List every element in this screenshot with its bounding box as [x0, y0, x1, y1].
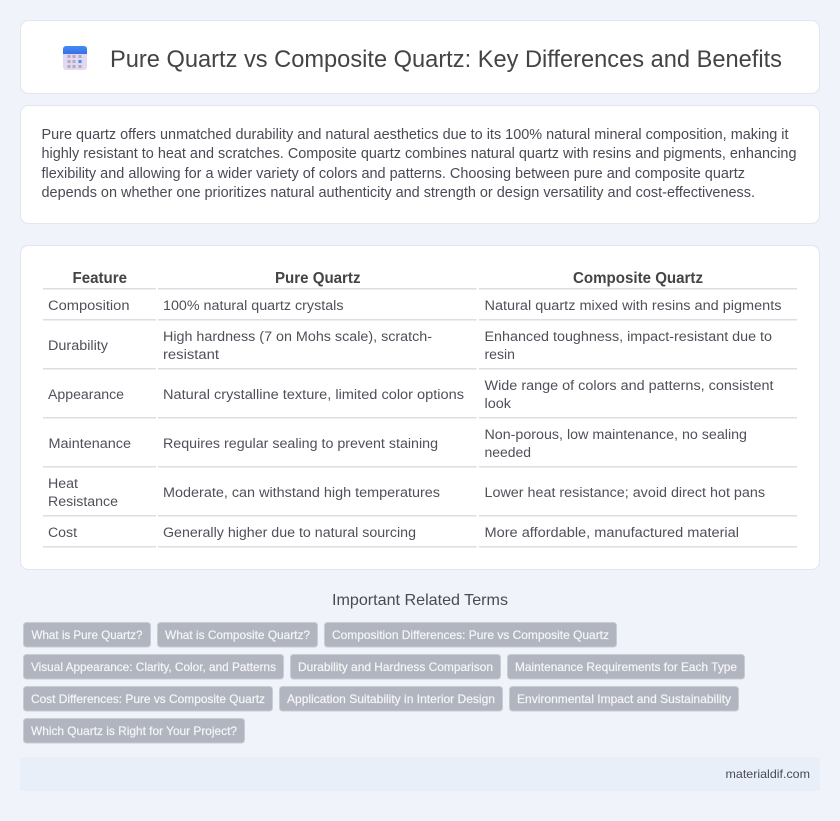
tag: Durability and Hardness Comparison	[298, 660, 493, 674]
tag: What is Composite Quartz?	[165, 628, 310, 642]
tag: Visual Appearance: Clarity, Color, and Patterns	[31, 660, 276, 674]
heading: important related terms: Important Related Terms	[332, 592, 508, 609]
footer source text: materialdif.com	[726, 767, 810, 781]
row: maintenance: Requires regular sealing to prevent staining	[163, 436, 438, 452]
tag	[24, 622, 150, 647]
tag	[24, 718, 244, 743]
panel: header	[20, 20, 820, 94]
tag	[508, 654, 744, 679]
tag: Cost Differences: Pure vs Composite Quartz	[31, 692, 265, 706]
table header row: Pure Quartz	[275, 270, 361, 287]
row: appearance: look	[484, 396, 512, 412]
tag	[510, 686, 738, 711]
row: cost	[48, 525, 739, 541]
row: durability: resistant	[163, 347, 219, 363]
row: composition	[48, 298, 782, 314]
tag	[324, 622, 616, 647]
footer	[20, 757, 820, 791]
row: appearance: Wide range of colors and patterns, consistent	[484, 378, 774, 394]
row: heat resistance	[48, 476, 765, 510]
tag	[280, 686, 502, 711]
row: durability: Enhanced toughness, impact-resistant due to	[484, 329, 772, 345]
table header row	[72, 270, 703, 287]
row: maintenance: needed	[484, 445, 531, 461]
tag: Which Quartz is Right for Your Project?	[31, 724, 237, 738]
tag: Environmental Impact and Sustainability	[517, 692, 731, 706]
intro text: highly resistant to heat and scratches. Composite quartz combines natural quartz with resins and pigments, enhancing	[42, 146, 797, 162]
row: heat resistance: Lower heat resistance; avoid direct hot pans	[484, 485, 765, 501]
row: maintenance: Non-porous, low maintenance, no sealing	[484, 427, 747, 443]
tag	[158, 622, 318, 647]
intro text: depends on whether one prioritizes natural authenticity and strength or design versatility and cost-effectiveness.	[42, 185, 755, 201]
table header row: Feature	[72, 270, 127, 287]
row: composition: 100% natural quartz crystals	[163, 298, 344, 314]
tag	[290, 654, 500, 679]
row: appearance: Appearance	[48, 387, 124, 403]
row: durability: High hardness (7 on Mohs scale), scratch-	[163, 329, 432, 345]
tag: Application Suitability in Interior Design	[287, 692, 495, 706]
row: cost: Generally higher due to natural sourcing	[163, 525, 416, 541]
tag: Composition Differences: Pure vs Composite Quartz	[332, 628, 609, 642]
tag	[24, 654, 284, 679]
intro text: Pure quartz offers unmatched durability and natural aesthetics due to its 100% natural mineral composition, making it	[42, 127, 788, 143]
row: composition: Composition	[48, 298, 130, 314]
intro text	[42, 127, 797, 201]
icon: calendar	[63, 46, 87, 70]
row: heat resistance: Heat	[48, 476, 78, 492]
row: maintenance	[48, 427, 747, 461]
tag	[24, 686, 272, 711]
row: composition: Natural quartz mixed with resins and pigments	[484, 298, 782, 314]
row: heat resistance: Moderate, can withstand high temperatures	[163, 485, 440, 501]
panel: related term tags	[24, 622, 744, 743]
row: appearance: Natural crystalline texture, limited color options	[163, 387, 464, 403]
tag: Maintenance Requirements for Each Type	[515, 660, 737, 674]
row: durability: resin	[484, 347, 515, 363]
title: Pure Quartz vs Composite Quartz: Key Differences and Benefits	[110, 46, 782, 73]
row: heat resistance: Resistance	[48, 494, 118, 510]
tag: What is Pure Quartz?	[32, 628, 143, 642]
row: durability	[48, 329, 772, 363]
intro text: flexibility and allowing for a wider variety of colors and patterns. Choosing between pure and composite quartz	[42, 166, 745, 182]
row: maintenance: Maintenance	[48, 436, 131, 452]
panel: comparison table	[20, 246, 820, 570]
table header row: Composite Quartz	[573, 270, 703, 287]
row: appearance	[48, 378, 774, 412]
row: durability: Durability	[48, 338, 109, 354]
panel: introduction	[20, 106, 820, 224]
row: cost: Cost	[48, 525, 77, 541]
row: cost: More affordable, manufactured material	[484, 525, 739, 541]
